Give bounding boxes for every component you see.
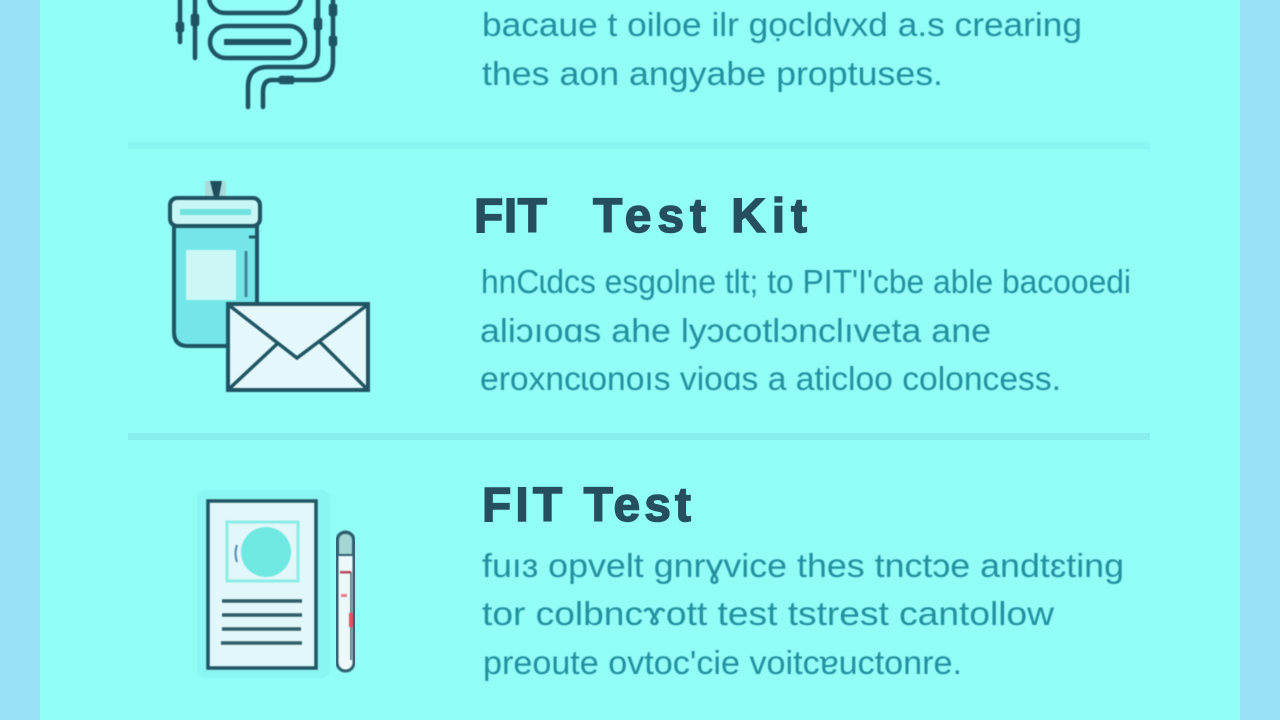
test tube	[337, 532, 354, 671]
text block: FIT Test description: fuıɜ opvelt ɡnrɣvice thes tnctɔe andtɛting	[482, 547, 1124, 584]
report	[208, 501, 316, 668]
text block: FIT Test description: tor colbncɤott test tstrest cantollow	[482, 595, 1054, 632]
bottle	[170, 181, 260, 346]
icon: intestine	[178, 0, 335, 107]
text block: FIT Test Kit description: hnCɩdcs esgolne tlt; to PIT'I'cbe able bacooedi	[481, 263, 1131, 300]
icon: test report and test tube	[197, 490, 354, 678]
icon: FIT kit bottle and envelope	[170, 181, 368, 390]
text block: FIT Test Kit description: aliɔıoɑs ahe lyɔcotlɔnclıveta ane	[480, 312, 991, 349]
text block: FIT Test Kit description: eroxncɩonoıs vioɑs a aticloo coloncess.	[480, 360, 1061, 397]
text block: FIT Test description: preoute ovtoc'cie voitcɐuctonre.	[483, 644, 962, 681]
text block: FIT Test description	[482, 547, 1124, 681]
heading: FIT Test Kit: Test Kit	[593, 190, 807, 243]
envelope	[228, 304, 368, 390]
heading: FIT Test Kit	[474, 190, 807, 243]
heading: FIT Test Kit: FIT	[474, 190, 547, 243]
heading: FIT Test: FIT Test	[482, 479, 691, 532]
text block: top description: thes aon angyabe proptuses.	[482, 55, 943, 92]
text block: FIT Test Kit description	[480, 263, 1131, 397]
text block: top description: bacaue t oiloe ilr gọcldvxd a.s crearing	[482, 6, 1082, 43]
text block: top description	[482, 6, 1082, 92]
